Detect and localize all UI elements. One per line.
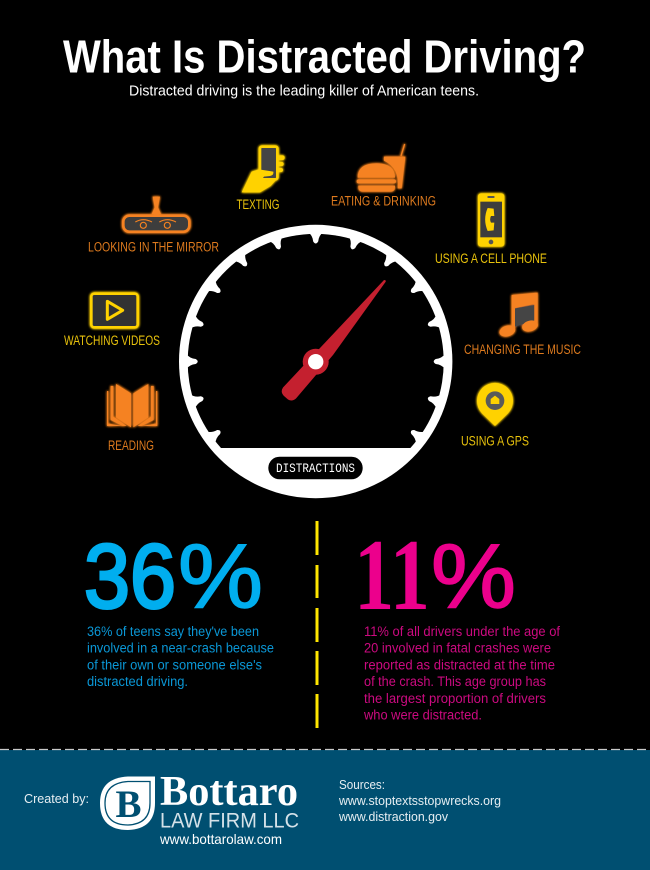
subtitle: Distracted driving is the leading killer of American teens. xyxy=(129,84,479,100)
logo wordmark: Bottaro xyxy=(160,769,298,815)
icon and label: watching videos xyxy=(64,294,160,348)
title: What Is Distracted Driving? xyxy=(63,30,586,82)
distractions pill label xyxy=(268,457,363,479)
created by label: Created by: xyxy=(24,791,89,806)
stat: 36 percent: 36 xyxy=(84,526,176,628)
icon and label: watching videos: WATCHING VIDEOS xyxy=(64,333,160,348)
icon and label: reading xyxy=(107,384,157,453)
stat: 11 percent xyxy=(354,519,560,723)
icon and label: texting xyxy=(236,147,285,212)
stat description: teens near-crash: distracted driving. xyxy=(87,674,188,689)
icon and label: eating and drinking xyxy=(331,144,436,208)
distractions pill label: DISTRACTIONS xyxy=(276,461,355,476)
stat description: teens near-crash: of their own or someone else's xyxy=(87,658,262,672)
icon and label: looking in the mirror: LOOKING IN THE MIRROR xyxy=(88,240,219,254)
yellow dashed divider xyxy=(316,521,318,728)
icon and label: using a cell phone: USING A CELL PHONE xyxy=(435,251,547,266)
logo: Bottaro shield xyxy=(100,776,155,830)
stat description: teens near-crash: 36% of teens say they've been xyxy=(87,624,259,639)
stat description: drivers under 20: reported as distracted at the time xyxy=(364,658,555,672)
icon and label: changing the music xyxy=(464,293,581,357)
logo: Bottaro shield: B xyxy=(116,783,142,826)
logo wordmark: LAW FIRM LLC xyxy=(160,810,299,832)
stat description: teens near-crash xyxy=(87,624,274,689)
stat description: drivers under 20: the largest proportion of drivers xyxy=(364,691,546,706)
stat: 36 percent: % xyxy=(178,526,263,628)
sources: Sources: xyxy=(339,778,385,792)
footer panel xyxy=(0,750,650,870)
stat: 11 percent: % xyxy=(431,526,516,628)
needle xyxy=(282,280,386,401)
sources: www.stoptextsstopwrecks.org xyxy=(338,794,501,808)
icon and label: reading: READING xyxy=(108,438,154,453)
speedometer gauge xyxy=(179,225,452,498)
icon and label: using a gps xyxy=(461,383,529,448)
stat description: teens near-crash: involved in a near-crash because xyxy=(87,641,274,656)
icon and label: using a cell phone xyxy=(435,193,547,266)
stat: 11 percent: 11 xyxy=(354,519,430,632)
stat description: drivers under 20: who were distracted. xyxy=(363,708,482,723)
sources xyxy=(338,778,501,824)
icon and label: using a gps: USING A GPS xyxy=(461,434,529,448)
stat description: drivers under 20: 11% of all drivers under the age of xyxy=(364,624,560,639)
stat: 36 percent xyxy=(84,526,274,689)
icon and label: changing the music: CHANGING THE MUSIC xyxy=(464,342,581,357)
logo wordmark: www.bottarolaw.com xyxy=(159,831,282,847)
sources: www.distraction.gov xyxy=(338,810,449,824)
stat description: drivers under 20: of the crash. This age group has xyxy=(364,674,546,689)
stat description: drivers under 20 xyxy=(363,624,560,723)
icon and label: looking in the mirror xyxy=(88,197,219,254)
icon and label: texting: TEXTING xyxy=(236,197,280,212)
icon and label: eating and drinking: EATING & DRINKING xyxy=(331,194,436,208)
logo wordmark xyxy=(159,769,299,847)
stat description: drivers under 20: 20 involved in fatal crashes were xyxy=(364,641,551,656)
